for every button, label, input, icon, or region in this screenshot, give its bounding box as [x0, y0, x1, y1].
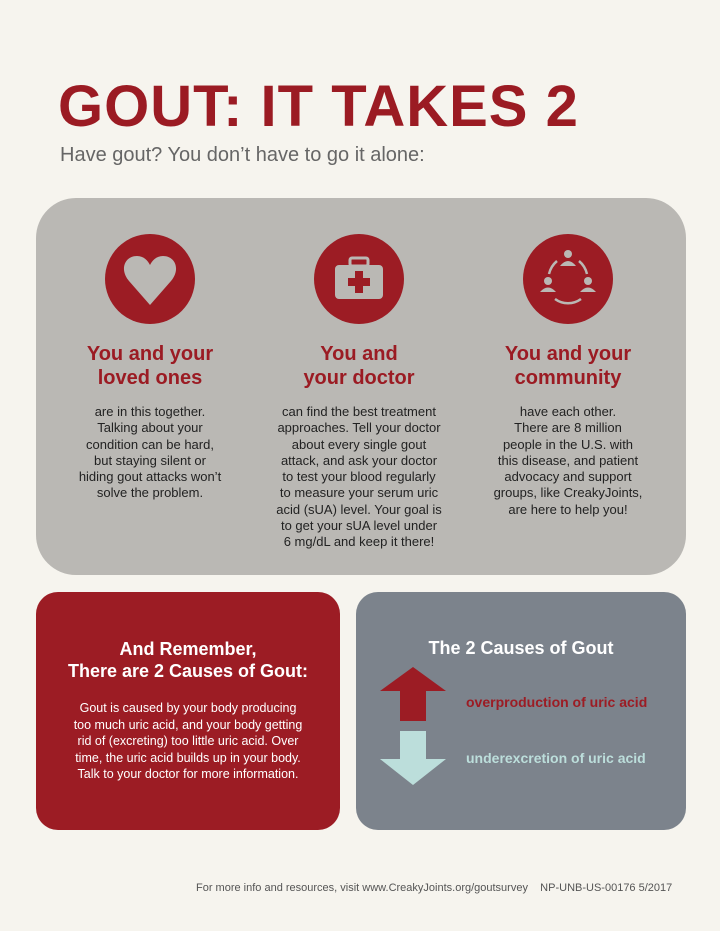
- body text: too much uric acid, and your body getting: [74, 718, 302, 732]
- footer: For more info and resources, visit www.CreakyJoints.org/goutsurvey NP-UNB-US-00176 5/2017: [196, 882, 672, 894]
- label: underexcretion: underexcretion of uric acid: [466, 750, 646, 766]
- column: doctor: attack, and ask your doctor: [281, 453, 437, 468]
- arrow: up: [380, 667, 446, 721]
- icon: heart: [105, 234, 195, 324]
- column: loved ones: solve the problem.: [97, 485, 203, 500]
- icon: community: [523, 234, 613, 324]
- column: doctor: to measure your serum uric: [280, 485, 438, 500]
- column: loved ones: [79, 343, 222, 500]
- arrow: down: [380, 731, 446, 785]
- column: community: advocacy and support: [504, 469, 632, 484]
- column: doctor: to get your sUA level under: [281, 518, 437, 533]
- column: doctor: approaches. Tell your doctor: [277, 420, 441, 435]
- column: community: are here to help you!: [508, 502, 628, 517]
- column: doctor: to test your blood regularly: [282, 469, 436, 484]
- column: loved ones: hiding gout attacks won’t: [79, 469, 221, 484]
- column: doctor: acid (sUA) level. Your goal is: [276, 502, 442, 517]
- column: doctor: [276, 343, 442, 549]
- column: community: groups, like CreakyJoints,: [494, 485, 642, 500]
- column: doctor: can find the best treatment: [282, 404, 436, 419]
- column: doctor: your doctor: [303, 367, 415, 389]
- column: doctor: You and: [320, 343, 398, 365]
- body text: rid of (excreting) too little uric acid. Over: [78, 734, 298, 748]
- column: community: this disease, and patient: [498, 453, 638, 468]
- icon: medical kit: [314, 234, 404, 324]
- heading: And Remember,: [119, 639, 257, 659]
- heading: [68, 639, 308, 681]
- column: community: You and your: [505, 343, 631, 365]
- heading: The 2 Causes of Gout: [428, 638, 614, 658]
- column: community: people in the U.S. with: [503, 437, 633, 452]
- column: community: have each other.: [520, 404, 616, 419]
- panel: remember: [36, 592, 340, 830]
- column: loved ones: are in this together.: [95, 404, 205, 419]
- column: community: community: [515, 367, 621, 389]
- column: loved ones: condition can be hard,: [86, 437, 214, 452]
- body text: Talk to your doctor for more information.: [78, 767, 298, 781]
- label: overproduction: overproduction of uric acid: [466, 694, 647, 710]
- title: GOUT: IT TAKES 2: [58, 74, 579, 139]
- panel: partners: [36, 198, 686, 575]
- subtitle: Have gout? You don’t have to go it alone:: [60, 144, 425, 166]
- column: doctor: 6 mg/dL and keep it there!: [284, 534, 434, 549]
- body text: [74, 701, 302, 781]
- column: loved ones: loved ones: [98, 367, 202, 389]
- column: doctor: about every single gout: [292, 437, 426, 452]
- column: community: There are 8 million: [514, 420, 622, 435]
- column: loved ones: You and your: [87, 343, 213, 365]
- heading: There are 2 Causes of Gout:: [68, 661, 308, 681]
- body text: Gout is caused by your body producing: [80, 701, 296, 715]
- column: loved ones: but staying silent or: [94, 453, 206, 468]
- column: loved ones: Talking about your: [97, 420, 203, 435]
- panel: causes: [356, 592, 686, 830]
- column: community: [494, 343, 642, 517]
- body text: time, the uric acid builds up in your body.: [75, 750, 301, 764]
